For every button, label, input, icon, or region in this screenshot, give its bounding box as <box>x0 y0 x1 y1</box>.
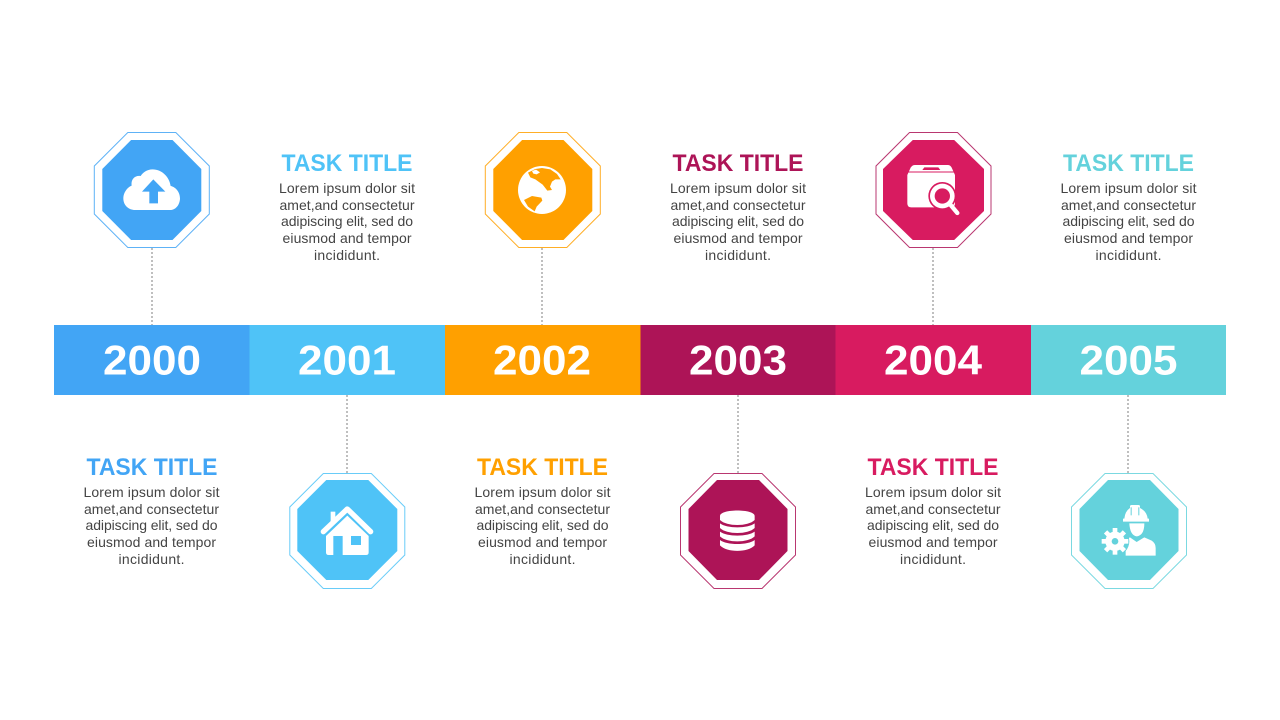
year 2000 segment <box>54 325 250 395</box>
text block: task 2003: incididunt. <box>705 247 771 263</box>
connector: 2003 <box>737 395 739 473</box>
text block: task 2003 <box>670 150 806 263</box>
text block: task 2000: adipiscing elit, sed do <box>86 517 218 533</box>
text block: task 2004: adipiscing elit, sed do <box>867 517 999 533</box>
year 2002 segment <box>445 325 640 395</box>
connector: 2000 <box>151 248 153 325</box>
text block: task 2000: amet,and consectetur <box>84 501 219 517</box>
year 2003 segment: 2003 <box>689 336 787 384</box>
text block: task 2001: incididunt. <box>314 247 380 263</box>
text block: task 2003: Lorem ipsum dolor sit <box>670 180 806 196</box>
text block: task 2001: adipiscing elit, sed do <box>281 213 413 229</box>
timeline bar <box>54 325 1226 395</box>
text block: task 2003: adipiscing elit, sed do <box>672 213 804 229</box>
text block: task 2002: incididunt. <box>510 551 576 567</box>
text block: task 2002: eiusmod and tempor <box>478 534 607 550</box>
text block: task 2000: incididunt. <box>118 551 184 567</box>
year 2001 segment: 2001 <box>298 336 396 384</box>
icon badge: globe <box>485 132 600 248</box>
text block: task 2001: eiusmod and tempor <box>282 230 412 246</box>
year 2002 segment: 2002 <box>493 336 591 384</box>
text block: task 2002 <box>474 454 611 567</box>
text block: task 2003: eiusmod and tempor <box>674 230 803 246</box>
icon badge: cloud upload <box>94 132 209 248</box>
year 2001 segment <box>250 325 445 395</box>
text block: task 2004: eiusmod and tempor <box>868 534 998 550</box>
text block: task 2000: TASK TITLE <box>86 454 218 481</box>
text block: task 2004: amet,and consectetur <box>866 501 1001 517</box>
connector: 2001 <box>346 395 348 473</box>
text block: task 2002: TASK TITLE <box>477 454 608 481</box>
year 2000 segment: 2000 <box>103 336 201 384</box>
text block: task 2004 <box>865 454 1001 567</box>
text block: task 2005: adipiscing elit, sed do <box>1062 213 1195 229</box>
text block: task 2005: TASK TITLE <box>1063 150 1194 177</box>
text block: task 2005: eiusmod and tempor <box>1064 230 1193 246</box>
text block: task 2001: TASK TITLE <box>282 150 412 177</box>
year 2004 segment <box>836 325 1031 395</box>
text block: task 2003: amet,and consectetur <box>670 197 806 213</box>
text block: task 2005 <box>1060 150 1197 263</box>
icon badge: engineer with gear <box>1072 474 1186 588</box>
year 2005 segment: 2005 <box>1080 336 1178 384</box>
text block: task 2005: incididunt. <box>1096 247 1162 263</box>
year 2005 segment <box>1031 325 1226 395</box>
icon badge: database <box>680 474 796 588</box>
connector: 2004 <box>932 248 934 325</box>
text block: task 2005: amet,and consectetur <box>1061 197 1196 213</box>
text block: task 2000 <box>84 454 220 567</box>
connector: 2002 <box>541 248 543 325</box>
text block: task 2000: eiusmod and tempor <box>87 534 216 550</box>
text block: task 2001: Lorem ipsum dolor sit <box>279 180 415 196</box>
icon badge: box search <box>876 132 991 248</box>
text block: task 2004: TASK TITLE <box>868 454 998 481</box>
year 2003 segment <box>640 325 836 395</box>
text block: task 2001: amet,and consectetur <box>280 197 415 213</box>
text block: task 2001 <box>279 150 415 263</box>
icon badge: house <box>290 474 405 588</box>
connector: 2005 <box>1127 395 1129 473</box>
text block: task 2004: incididunt. <box>900 551 966 567</box>
text block: task 2000: Lorem ipsum dolor sit <box>84 484 220 500</box>
text block: task 2005: Lorem ipsum dolor sit <box>1060 180 1197 196</box>
text block: task 2002: amet,and consectetur <box>475 501 610 517</box>
text block: task 2004: Lorem ipsum dolor sit <box>865 484 1001 500</box>
year 2004 segment: 2004 <box>884 336 983 384</box>
text block: task 2002: adipiscing elit, sed do <box>476 517 609 533</box>
text block: task 2002: Lorem ipsum dolor sit <box>474 484 611 500</box>
text block: task 2003: TASK TITLE <box>672 150 804 177</box>
